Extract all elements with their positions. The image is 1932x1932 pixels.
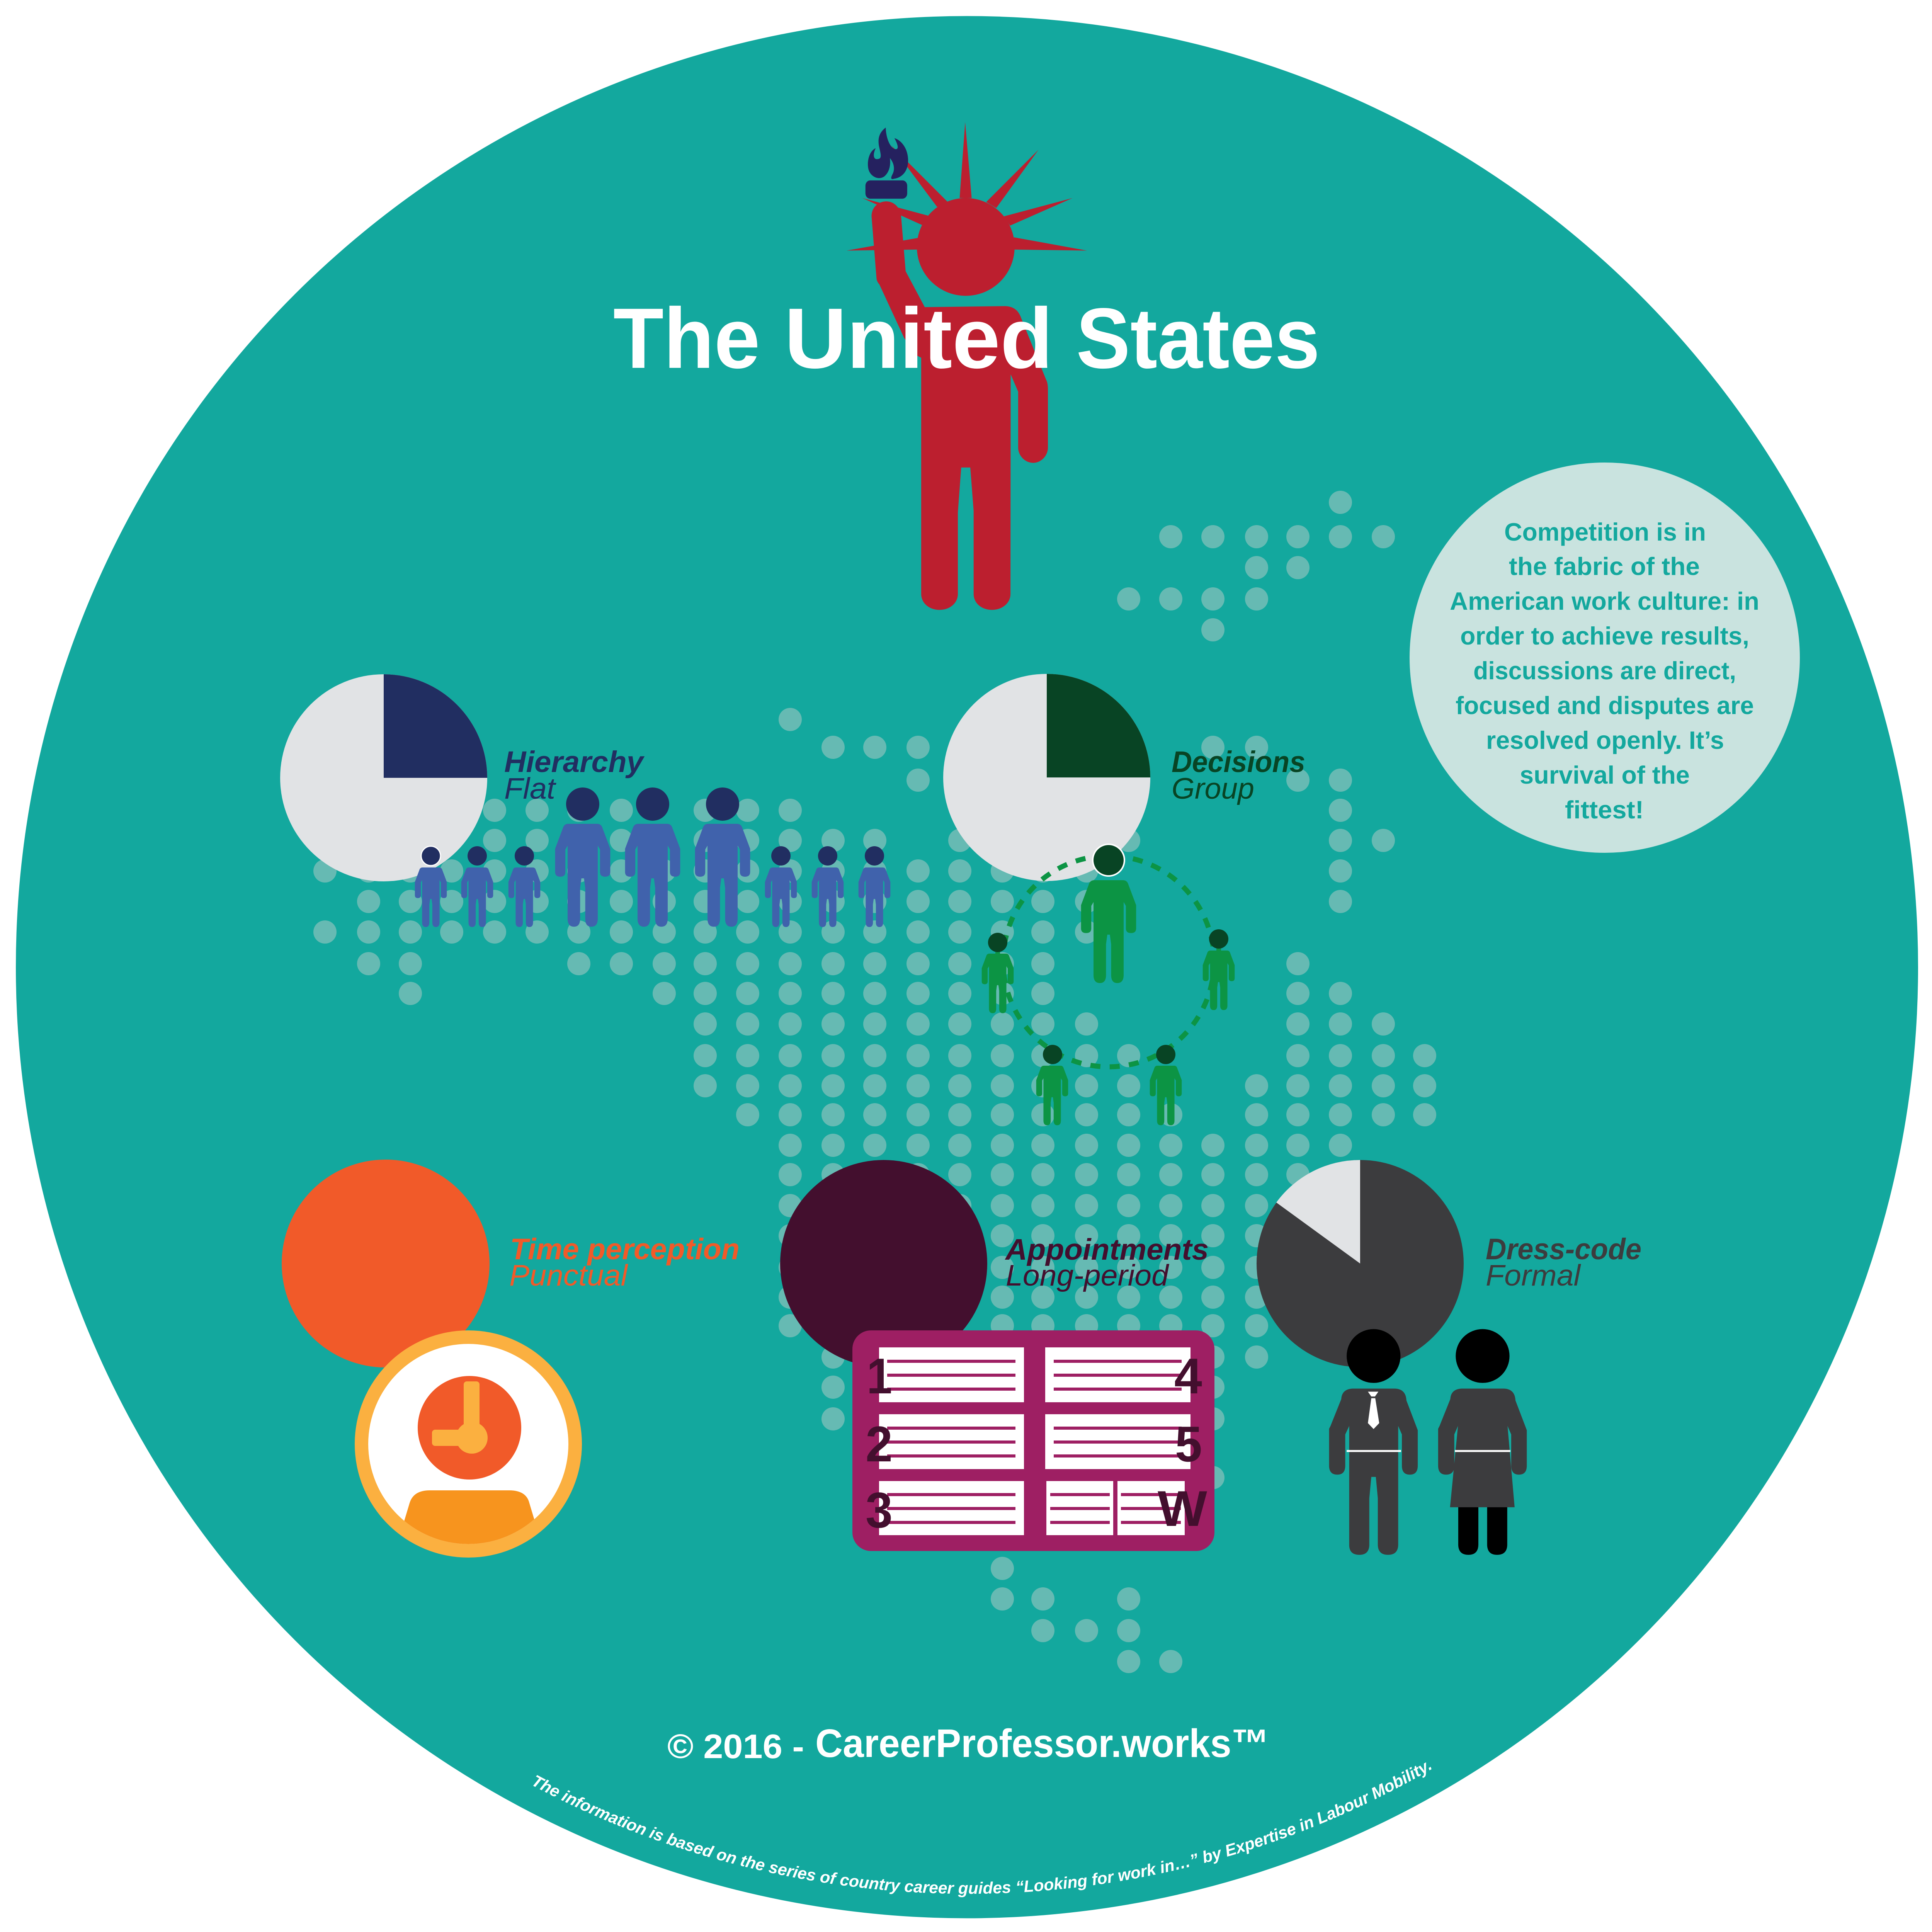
- label: decisions: Group: [1172, 772, 1254, 805]
- callout: competition: focused and disputes are: [1456, 691, 1754, 719]
- label: dress-code: [1486, 1233, 1641, 1292]
- title: States: [1076, 291, 1320, 386]
- title: [613, 291, 1320, 386]
- title: United: [784, 291, 1053, 386]
- icon: clock-headed person: [355, 1330, 582, 1558]
- callout: competition: fittest!: [1565, 796, 1644, 824]
- label: decisions: [1172, 745, 1305, 805]
- panel: dress-code: [1257, 1160, 1641, 1555]
- icon: weekly schedule: W: [1158, 1480, 1207, 1537]
- icon: weekly schedule: 4: [1174, 1348, 1202, 1404]
- label: dress-code: Formal: [1486, 1259, 1581, 1292]
- curved source note: The information is based on the series of country career guides “Looking for work in…” by Expertise in Labour Mobility.: [529, 1755, 1435, 1898]
- label: hierarchy: Hierarchy: [504, 745, 645, 779]
- label: hierarchy: Flat: [504, 772, 557, 805]
- callout: competition: survival of the: [1520, 761, 1690, 789]
- label: appointments: Long-period: [1006, 1259, 1169, 1292]
- copyright footer: © 2016 -: [667, 1727, 804, 1765]
- panel: hierarchy: [280, 674, 890, 927]
- label: appointments: [1005, 1233, 1209, 1292]
- icon: weekly schedule: 1: [867, 1348, 892, 1404]
- callout: competition: American work culture: in: [1450, 587, 1759, 615]
- panel: appointments: [780, 1160, 1214, 1551]
- callout: competition: order to achieve results,: [1460, 622, 1749, 650]
- pie chart: time perception: [282, 1160, 490, 1367]
- icon: weekly schedule: 3: [866, 1482, 893, 1538]
- label: hierarchy: [504, 745, 645, 805]
- icon: weekly schedule: 5: [1175, 1416, 1202, 1472]
- icon: man in suit: [1329, 1329, 1418, 1555]
- label: time perception: Time perception: [510, 1233, 740, 1266]
- dotted world map: [325, 502, 1425, 1662]
- panel: time perception: [282, 1160, 740, 1558]
- label: time perception: [509, 1233, 740, 1292]
- callout: competition: the fabric of the: [1509, 552, 1700, 580]
- label: decisions: Decisions: [1172, 745, 1305, 779]
- label: time perception: Punctual: [509, 1259, 628, 1292]
- pie chart: appointments: [780, 1160, 987, 1367]
- Statue of Liberty figure: [847, 122, 1087, 610]
- callout: competition: [1410, 463, 1800, 853]
- pie chart: dress-code: [1257, 1160, 1464, 1367]
- icon: row of people: [415, 787, 890, 927]
- callout: competition: discussions are direct,: [1473, 656, 1736, 685]
- copyright footer: CareerProfessor.works™: [815, 1721, 1269, 1765]
- icon: group of people in a circle: [982, 844, 1235, 1125]
- callout: competition: Competition is in: [1504, 518, 1706, 546]
- pie chart: hierarchy: [280, 674, 487, 881]
- label: appointments: Appointments: [1005, 1233, 1209, 1266]
- pie chart: decisions: [943, 674, 1150, 881]
- icon: weekly schedule: 2: [866, 1416, 893, 1472]
- title: The: [613, 291, 760, 386]
- icon: weekly schedule: [852, 1330, 1214, 1551]
- icon: woman in skirt: [1438, 1329, 1527, 1555]
- callout: competition: resolved openly. It’s: [1486, 726, 1724, 754]
- panel: decisions: [943, 674, 1305, 1125]
- label: dress-code: Dress-code: [1486, 1233, 1641, 1266]
